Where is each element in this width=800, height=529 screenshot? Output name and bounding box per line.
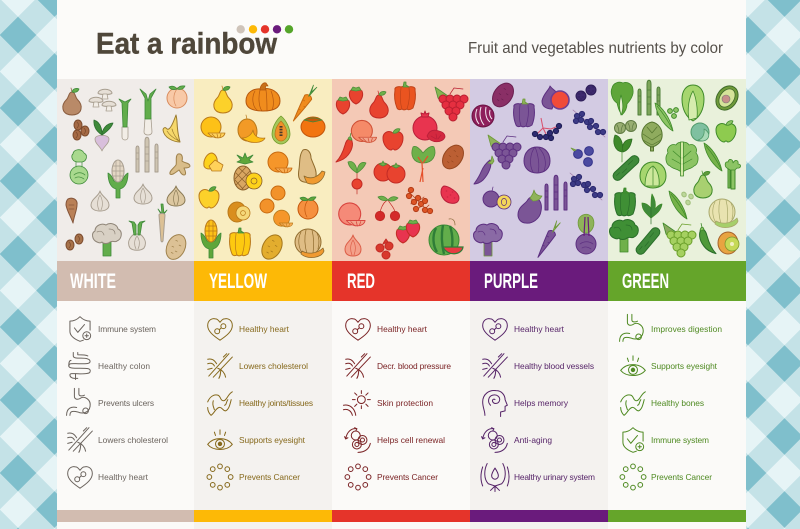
pear — [214, 86, 232, 113]
benefit: supports eyesight — [208, 430, 306, 450]
turnip — [94, 120, 113, 151]
lemon — [204, 153, 223, 171]
strawberries — [336, 87, 363, 114]
benefit: lowers cholesterol — [68, 428, 168, 452]
green chili — [700, 223, 716, 254]
broccoli — [610, 220, 638, 252]
grapefruit — [351, 120, 377, 142]
panel: green foods — [608, 79, 746, 261]
leaf lettuce — [666, 142, 698, 176]
header: purple: PURPLE — [484, 270, 538, 293]
benefit: healthy heart — [208, 319, 290, 340]
kiwi — [228, 202, 250, 222]
chili — [336, 133, 352, 162]
benefit: decreases blood pressure — [346, 354, 451, 378]
apple — [716, 121, 736, 142]
pear — [370, 91, 388, 118]
benefit: healthy heart — [68, 467, 149, 488]
cucumber — [634, 226, 662, 256]
panel: green benefits — [608, 301, 746, 529]
benefit: helps memory: Helps memory — [514, 398, 569, 408]
benefit: supports eyesight: Supports eyesight — [239, 435, 306, 445]
benefit: healthy joints and tissues — [208, 392, 313, 415]
purple kohlrabi — [576, 214, 596, 254]
asparagus — [136, 137, 158, 172]
panel: purple foods — [470, 79, 608, 261]
radicchio — [472, 105, 494, 127]
plums — [483, 187, 511, 209]
bell pepper — [514, 99, 534, 127]
benefit: healthy heart: Healthy heart — [514, 324, 565, 334]
peach — [298, 197, 318, 219]
melon — [295, 229, 324, 258]
benefit: helps memory — [483, 391, 569, 416]
benefit: supports eyesight: Supports eyesight — [651, 361, 718, 371]
fig — [542, 86, 569, 109]
benefit: decreases blood pressure: Decr. blood pressure — [377, 361, 451, 371]
benefit: prevents ulcers: Prevents ulcers — [98, 398, 154, 408]
header: green: GREEN — [622, 270, 669, 293]
cucumber — [611, 154, 641, 182]
benefit: healthy bones — [621, 392, 704, 415]
benefit: healthy colon: Healthy colon — [98, 361, 150, 371]
subtitle: Fruit and vegetables nutrients by color — [468, 40, 724, 57]
benefit: improves digestion — [620, 314, 722, 341]
berries on stem — [570, 173, 603, 200]
benefit: healthy urinary system: Healthy urinary system — [514, 472, 595, 482]
banana — [163, 115, 180, 142]
mushrooms — [89, 89, 116, 111]
cherries — [375, 196, 400, 221]
butternut squash — [299, 150, 325, 184]
asparagus — [638, 80, 660, 115]
garlic — [134, 184, 152, 204]
header: red — [332, 261, 470, 301]
orange slice — [274, 210, 293, 227]
leek — [119, 99, 131, 140]
benefit: healthy blood vessels — [483, 354, 594, 378]
panel: white foods — [57, 79, 194, 263]
melon — [709, 199, 738, 228]
benefit: healthy joints and tissues: Healthy joints/tissues — [239, 398, 313, 408]
panel: red benefits — [332, 301, 470, 529]
radish — [348, 162, 366, 194]
benefit: anti-aging: Anti-aging — [514, 435, 552, 445]
parsnip — [66, 198, 77, 223]
benefit: prevents cancer — [620, 464, 712, 490]
benefit: supports eyesight — [621, 356, 718, 376]
tangerine — [268, 152, 292, 173]
napa cabbage — [682, 85, 704, 121]
celery — [725, 159, 741, 189]
benefit: prevents ulcers — [67, 388, 154, 415]
cabbage — [640, 162, 666, 188]
benefit: helps cell renewal: Helps cell renewal — [377, 435, 445, 445]
apricots — [260, 186, 285, 213]
blackberries — [576, 85, 596, 101]
parsnip — [158, 204, 167, 242]
header: yellow: YELLOW — [209, 270, 267, 293]
benefit: skin protection — [343, 391, 433, 415]
benefit: healthy heart: Healthy heart — [98, 472, 149, 482]
kohlrabi — [70, 150, 88, 184]
orange — [201, 117, 225, 138]
potato — [258, 231, 286, 263]
peach — [167, 86, 187, 108]
pea pod — [655, 103, 673, 131]
colour dots — [236, 25, 293, 34]
benefit: prevents cancer — [345, 464, 438, 490]
brussels sprouts — [614, 120, 636, 134]
corn — [201, 220, 221, 258]
grapefruit — [339, 203, 365, 226]
watermelon — [429, 219, 463, 255]
benefit: prevents cancer: Prevents Cancer — [377, 472, 438, 482]
panel: purple benefits — [470, 301, 608, 529]
benefit: healthy bones: Healthy bones — [651, 398, 704, 408]
elderberries — [532, 118, 562, 141]
garlic — [91, 191, 109, 211]
beans — [73, 120, 89, 140]
benefit: lowers cholesterol: Lowers cholesterol — [239, 361, 308, 371]
header: white — [57, 261, 194, 301]
pear — [694, 171, 712, 198]
benefit: immune system: Immune system — [98, 324, 156, 334]
lettuce ball — [691, 123, 709, 141]
turnip — [167, 186, 185, 206]
eggplant — [518, 190, 542, 223]
pea pod — [669, 191, 687, 219]
grapes — [488, 135, 521, 169]
mango — [238, 115, 265, 143]
header: purple — [470, 261, 608, 301]
artichoke — [642, 122, 662, 151]
shallot — [345, 235, 361, 256]
benefit: immune system — [623, 428, 709, 452]
purple chili — [474, 156, 494, 184]
cauliflower — [93, 224, 121, 256]
avocado — [711, 82, 743, 114]
purple broccoli — [474, 224, 502, 256]
peas — [668, 108, 678, 118]
header: green — [608, 261, 746, 301]
benefit: healthy heart: Healthy heart — [239, 324, 290, 334]
header: white: WHITE — [70, 270, 116, 293]
header: yellow — [194, 261, 332, 301]
romaine lettuce — [611, 82, 633, 115]
potato — [162, 231, 190, 263]
purple carrot — [535, 220, 562, 259]
red cabbage — [524, 147, 550, 173]
pea pod — [704, 143, 722, 171]
apple — [199, 187, 219, 208]
footer colour bars — [57, 510, 746, 522]
header: red: RED — [347, 270, 375, 293]
grapes — [663, 223, 696, 257]
potato — [438, 141, 468, 173]
leek — [140, 89, 156, 135]
benefit: healthy urinary system — [481, 464, 595, 492]
benefit: healthy heart — [346, 319, 428, 340]
kiwi — [718, 232, 739, 254]
benefit: anti-aging — [482, 428, 552, 452]
panel: yellow foods — [194, 79, 332, 263]
berries on stem — [573, 110, 606, 137]
pomegranate — [413, 111, 445, 142]
tomatoes — [374, 161, 405, 183]
strawberry — [441, 186, 459, 203]
panel: white benefits — [57, 301, 194, 529]
benefit: helps cell renewal — [345, 428, 445, 452]
benefit: prevents cancer — [207, 464, 300, 490]
persimmon — [301, 117, 325, 137]
benefit: lowers cholesterol: Lowers cholesterol — [98, 435, 168, 445]
papaya — [272, 116, 290, 144]
benefit: healthy heart — [483, 319, 565, 340]
asparagus — [545, 175, 567, 210]
beans — [66, 234, 83, 250]
arugula — [642, 194, 662, 224]
carrot — [290, 84, 319, 123]
currants — [406, 187, 433, 214]
benefit: healthy heart: Healthy heart — [377, 324, 428, 334]
strawberries — [396, 220, 420, 243]
corn — [108, 160, 128, 198]
pear — [63, 88, 81, 115]
grapes — [435, 87, 468, 121]
bell pepper — [230, 228, 250, 256]
benefit: immune system: Immune system — [651, 435, 709, 445]
spinach — [614, 135, 632, 162]
pumpkin — [246, 83, 280, 111]
bell pepper — [395, 82, 415, 110]
benefit: prevents cancer: Prevents Cancer — [239, 472, 300, 482]
panel: yellow benefits — [194, 301, 332, 529]
blueberries — [571, 147, 593, 166]
benefit: healthy colon — [69, 353, 150, 379]
benefit: immune system — [70, 317, 156, 341]
beans — [682, 192, 693, 205]
fennel — [129, 221, 145, 250]
pineapple — [234, 153, 262, 190]
apple — [383, 129, 403, 150]
benefit: healthy blood vessels: Healthy blood vessels — [514, 361, 594, 371]
benefit: lowers cholesterol — [208, 354, 308, 378]
benefit: skin protection: Skin protection — [377, 398, 433, 408]
currants — [376, 239, 393, 259]
bell pepper — [615, 188, 635, 216]
benefit: prevents cancer: Prevents Cancer — [651, 472, 712, 482]
panel: red foods — [332, 79, 470, 261]
title: Eat a rainbow — [96, 28, 278, 60]
benefit: improves digestion: Improves digestion — [651, 324, 722, 334]
potato — [488, 79, 518, 111]
red chard — [412, 146, 435, 182]
ginger — [170, 154, 190, 175]
